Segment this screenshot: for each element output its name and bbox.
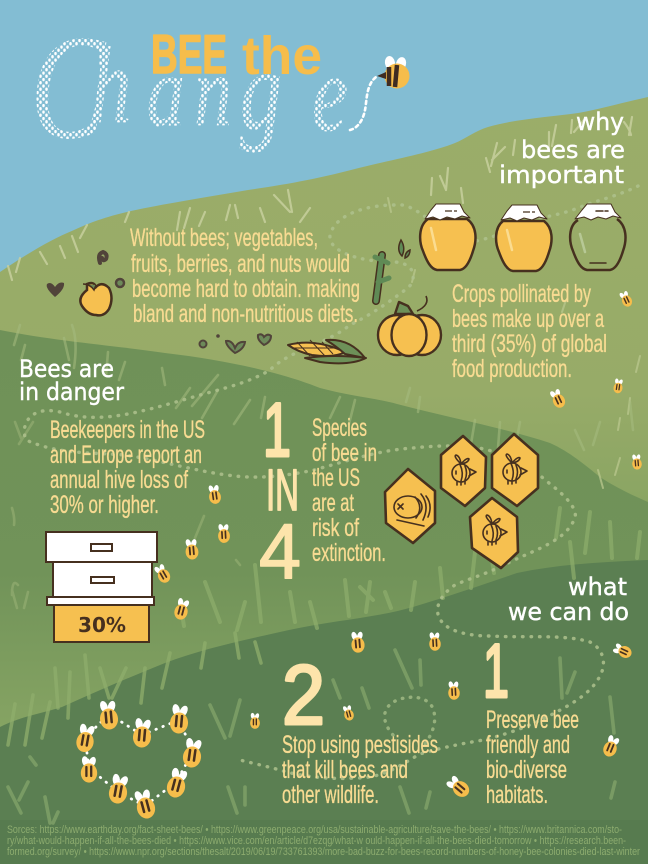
- text: without bees: become hard to obtain. making: [132, 275, 360, 303]
- icon: decorative leaves and berries: [200, 334, 271, 353]
- text: preserve habitats: habitats.: [486, 781, 548, 809]
- heading: what we can do: [508, 573, 629, 626]
- text: species of bee: Species: [312, 414, 367, 442]
- scattered bees: [153, 289, 642, 800]
- text: without bees: bland and non-nutritious diets.: [133, 300, 358, 328]
- title: dotted script word Change: h: [91, 26, 131, 146]
- icon: apple: [80, 283, 112, 315]
- title: BEE the: the: [242, 26, 322, 86]
- icon: honeycomb with dead bee: [385, 469, 435, 543]
- text: stop pesticides: that kill bees and: [282, 756, 408, 784]
- icon: second honey jar: [496, 205, 552, 271]
- text: preserve habitats: Preserve bee: [486, 706, 579, 734]
- heading: bees are in danger: in danger: [19, 378, 124, 406]
- text: species of bee: risk of: [312, 514, 359, 542]
- text: without bees: Without bees; vegetables,: [130, 224, 318, 252]
- text: crops pollinated: [452, 280, 607, 383]
- icon: beehive with 30% fill: 30%: [78, 613, 126, 637]
- statistic: 1 in 4: 4: [259, 507, 301, 595]
- icon: corn: [288, 340, 366, 363]
- numeral: 1: 1: [483, 629, 509, 714]
- title: dotted script word Change: e: [312, 34, 348, 154]
- text: without bees: fruits, berries, and nuts would: [131, 250, 350, 278]
- text: beekeepers: Beekeepers in the US: [50, 416, 205, 444]
- dotted flight trail across the meadows: [24, 186, 638, 778]
- icon: honeycomb with bee, left: [441, 436, 486, 506]
- title: dotted script word Change: a: [147, 37, 184, 148]
- heart of bees: [75, 699, 204, 821]
- bee flight trail from title: [350, 77, 376, 130]
- text: preserve habitats: friendly and: [486, 731, 570, 759]
- icon: empty honey jar: [570, 204, 625, 270]
- heading: what we can do: we can do: [508, 598, 629, 626]
- title: dotted script word Change: n: [194, 37, 232, 148]
- text: species of bee: the US: [312, 464, 360, 492]
- text: species of bee: extinction.: [312, 539, 386, 567]
- text: preserve habitats: [486, 706, 579, 809]
- heading: why bees are important: why: [576, 108, 624, 136]
- hill: middle meadow: [0, 330, 648, 864]
- text: species of bee: [312, 414, 386, 567]
- hill: lower meadow: [0, 560, 648, 864]
- title: dotted script word Change: C: [31, 6, 106, 170]
- icon: pumpkin: [378, 296, 441, 356]
- text: stop pesticides: [282, 731, 438, 809]
- statistic: 1 in 4: IN: [266, 458, 299, 523]
- text: beekeepers: and Europe report an: [50, 441, 202, 469]
- heading: bees are in danger: Bees are: [19, 355, 114, 383]
- sources footer: [7, 824, 640, 858]
- heading: why bees are important: bees are: [521, 136, 625, 164]
- icon: beehive with 30% fill: [46, 532, 157, 642]
- title: BEE the: [151, 23, 322, 86]
- icon: title bee: [377, 55, 410, 88]
- icon: honeycomb with bee, lower: [470, 498, 518, 568]
- text: preserve habitats: bio-diverse: [486, 756, 567, 784]
- dotted loop on lower meadow: [385, 697, 435, 748]
- text: stop pesticides: other wildlife.: [282, 781, 379, 809]
- text: stop pesticides: Stop using pestisides: [282, 731, 438, 759]
- heading: what we can do: what: [568, 573, 627, 601]
- text: beekeepers: annual hive loss of: [50, 466, 188, 494]
- text: species of bee: of bee in: [312, 439, 377, 467]
- statistic: 1 in 4: [259, 388, 301, 595]
- text: without bees: [130, 224, 360, 328]
- text: species of bee: are at: [312, 489, 354, 517]
- statistic: 1 in 4: 1: [263, 388, 291, 473]
- heading: bees are in danger: [19, 355, 124, 406]
- icon: sprout: [375, 240, 410, 301]
- text: beekeepers: 30% or higher.: [50, 491, 159, 519]
- footer band: [0, 820, 648, 864]
- title: BEE the: BEE: [151, 23, 227, 85]
- heading: why bees are important: important: [499, 161, 624, 189]
- heading: why bees are important: [499, 108, 625, 189]
- icon: full honey jar: [420, 204, 475, 270]
- icon: decorative heart and berries: [47, 252, 124, 297]
- title: dotted script word Change: g: [240, 30, 282, 153]
- text: crops pollinated: food production.: [452, 355, 572, 383]
- numeral: 2: 2: [282, 648, 325, 742]
- grass blades: [8, 117, 640, 823]
- icon: honeycomb with bee, right: [492, 434, 538, 506]
- text: beekeepers: [50, 416, 205, 519]
